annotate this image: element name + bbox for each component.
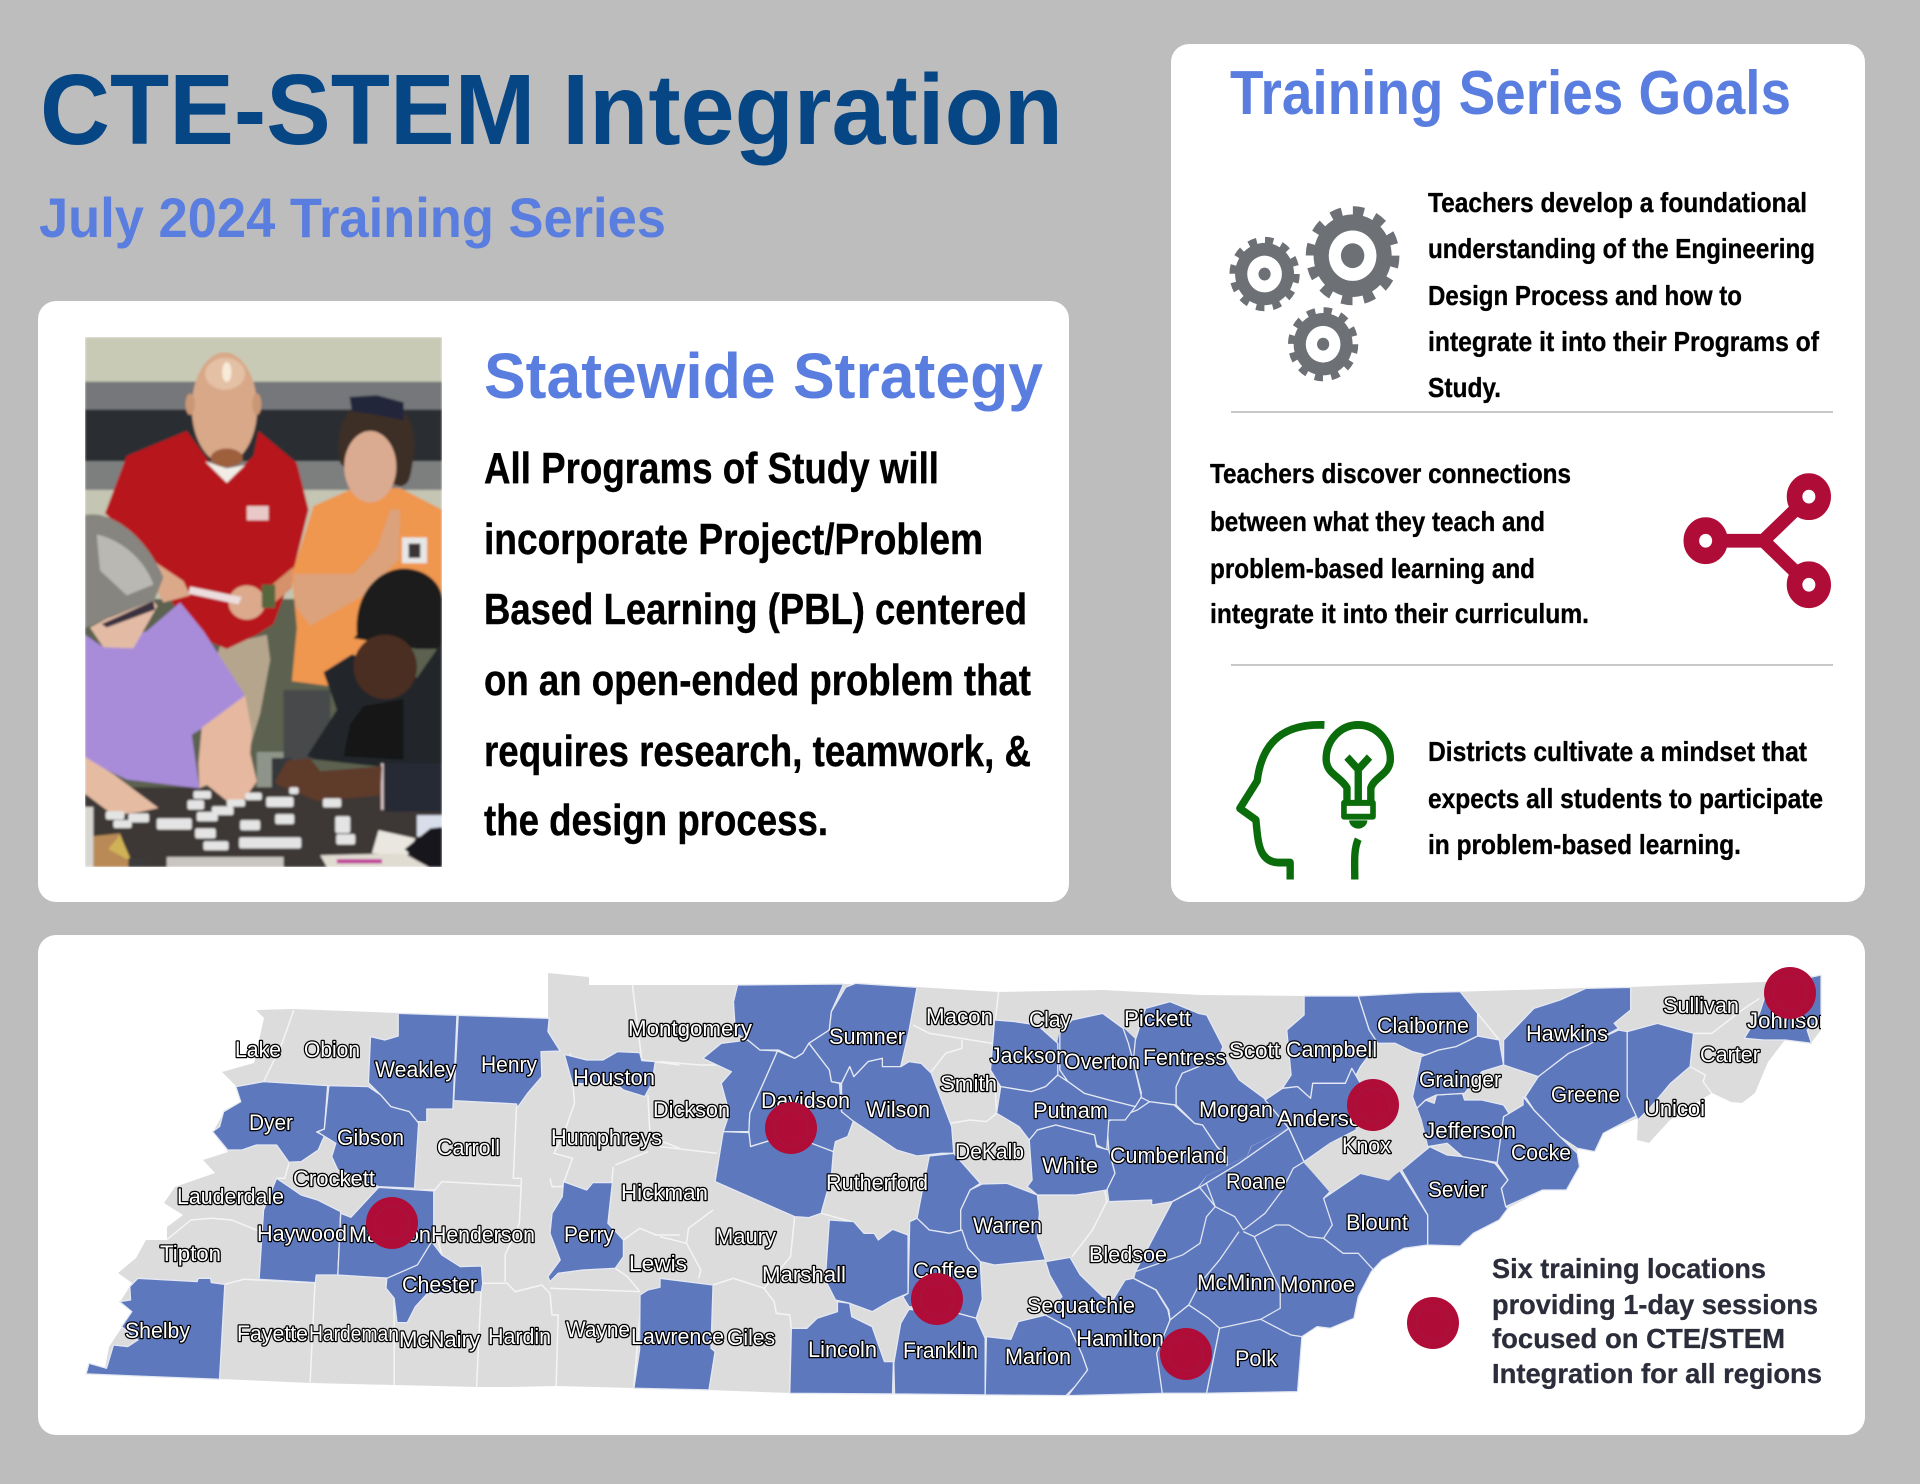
text: strategy statement: requires research, teamwork, &	[484, 727, 1031, 776]
county name labels: Campbell	[1286, 1037, 1377, 1062]
text: goal three: Districts cultivate a mindset that	[1428, 736, 1807, 767]
county name labels: Dickson	[653, 1097, 730, 1122]
county name labels: Lincoln	[808, 1337, 877, 1362]
text: strategy statement	[484, 444, 1031, 845]
text: goal two: Teachers discover connections	[1210, 458, 1571, 489]
county name labels: Lake	[235, 1037, 281, 1062]
county name labels: Hawkins	[1526, 1021, 1608, 1046]
text: goal three: expects all students to participate	[1428, 783, 1823, 814]
text: goal two: between what they teach and	[1210, 506, 1545, 537]
county name labels: Putnam	[1033, 1098, 1108, 1123]
county name labels: Dyer	[249, 1110, 293, 1135]
text: goal one: Study.	[1428, 372, 1501, 403]
text: goal one: integrate it into their Programs of	[1428, 326, 1820, 357]
county name labels: Coffee	[913, 1258, 978, 1283]
county name labels: Warren	[973, 1213, 1042, 1238]
county name labels: Gibson	[337, 1125, 404, 1150]
county name labels: Sequatchie	[1027, 1293, 1135, 1318]
county name labels: Greene	[1551, 1082, 1620, 1107]
county name labels: Lawrence	[631, 1324, 724, 1349]
county name labels: Fayette	[237, 1321, 308, 1346]
text: goal two: problem-based learning and	[1210, 553, 1535, 584]
legend marker	[1407, 1297, 1459, 1349]
text: goal one: Teachers develop a foundational	[1428, 187, 1807, 218]
county name labels: Montgomery	[628, 1016, 752, 1041]
county name labels: Hardeman	[309, 1321, 399, 1346]
text: goal three: in problem-based learning.	[1428, 829, 1741, 860]
county name labels: Rutherford	[826, 1170, 928, 1195]
county name labels: McNairy	[399, 1327, 480, 1352]
blue counties: middle	[634, 983, 1289, 1396]
blue counties: west	[86, 1013, 655, 1379]
county name labels: DeKalb	[955, 1139, 1024, 1164]
heading: training series goals: Training Series Goals	[1230, 59, 1791, 128]
text: goal one: understanding of the Engineering	[1428, 233, 1815, 264]
county name labels: Maury	[715, 1224, 776, 1249]
icon: head with lightbulb	[1240, 725, 1390, 880]
county name labels: Cocke	[1511, 1140, 1571, 1165]
county name labels: Henderson	[431, 1222, 535, 1247]
panel: statewide strategy	[38, 301, 1069, 902]
text: strategy statement: incorporate Project/Problem	[484, 515, 983, 564]
county name labels: Wayne	[566, 1317, 630, 1342]
county name labels: Macon	[926, 1004, 993, 1029]
county name labels: Monroe	[1280, 1272, 1355, 1297]
county name labels: Fentress	[1143, 1045, 1226, 1070]
county name labels: Roane	[1226, 1169, 1286, 1194]
text: strategy statement: on an open-ended problem that	[484, 656, 1031, 705]
county name labels: Franklin	[903, 1338, 978, 1363]
text: goal three	[1428, 736, 1823, 860]
county name labels: Grainger	[1419, 1067, 1501, 1092]
county name labels: Davidson	[761, 1088, 850, 1113]
woman in orange	[292, 488, 442, 690]
legend text: Six training locations	[1492, 1253, 1766, 1284]
county name labels: Clay	[1029, 1007, 1071, 1032]
county name labels: Claiborne	[1377, 1013, 1469, 1038]
seated woman	[354, 569, 442, 649]
county name labels: Bledsoe	[1089, 1242, 1167, 1267]
county name labels: Weakley	[375, 1057, 456, 1082]
county name labels: Hamilton	[1076, 1326, 1164, 1351]
panel: tennessee map	[38, 935, 1865, 1435]
county name labels: Johnson	[1747, 1008, 1831, 1033]
legend text: Integration for all regions	[1492, 1358, 1822, 1389]
text: strategy statement: the design process.	[484, 796, 828, 845]
county name labels: Chester	[402, 1272, 477, 1297]
county name labels: Giles	[727, 1325, 775, 1350]
county name labels: Jackson	[990, 1043, 1068, 1068]
county name labels	[125, 993, 1831, 1371]
county name labels: Houston	[573, 1065, 655, 1090]
county name labels: Wilson	[866, 1097, 930, 1122]
blue counties: east	[1134, 975, 1821, 1393]
legend text: providing 1-day sessions	[1492, 1289, 1818, 1320]
county name labels: Polk	[1235, 1346, 1278, 1371]
county name labels: Haywood	[257, 1221, 347, 1246]
county name labels: Hickman	[621, 1180, 708, 1205]
text: goal one: Design Process and how to	[1428, 280, 1742, 311]
desk items	[372, 830, 415, 856]
county name labels: Tipton	[160, 1241, 221, 1266]
county name labels: Carter	[1700, 1042, 1760, 1067]
county name labels: Cumberland	[1110, 1143, 1227, 1168]
county name labels: Pickett	[1124, 1006, 1191, 1031]
table	[85, 787, 442, 867]
text: goal one	[1428, 187, 1820, 403]
county name labels: Anderson	[1277, 1106, 1374, 1131]
county name labels: Obion	[304, 1037, 360, 1062]
county name labels: Humphreys	[551, 1125, 662, 1150]
county name labels: Sevier	[1428, 1177, 1487, 1202]
subtitle: July 2024 Training Series	[39, 186, 666, 249]
photo: teachers solving a puzzle	[85, 337, 442, 867]
title: CTE-STEM Integration	[40, 54, 1063, 166]
text: strategy statement: Based Learning (PBL) centered	[484, 585, 1027, 634]
puzzle pieces	[106, 787, 355, 850]
text: strategy statement: All Programs of Study will	[484, 444, 939, 493]
county name labels: Sullivan	[1663, 993, 1739, 1018]
county name labels: Hardin	[488, 1324, 551, 1349]
county name labels: Marshall	[762, 1262, 846, 1287]
county name labels: Blount	[1346, 1210, 1408, 1235]
legend text	[1492, 1253, 1822, 1389]
county name labels: White	[1042, 1153, 1098, 1178]
wall and floor	[85, 337, 442, 383]
chair	[284, 690, 330, 760]
text: goal two: integrate it into their curriculum.	[1210, 598, 1589, 629]
text: goal two	[1210, 458, 1589, 629]
county name labels: Overton	[1064, 1049, 1140, 1074]
county name labels: McMinn	[1197, 1270, 1275, 1295]
county name labels: Madison	[349, 1222, 431, 1247]
county name labels: Smith	[940, 1071, 997, 1096]
county name labels: Scott	[1229, 1038, 1280, 1063]
county name labels: Shelby	[125, 1318, 190, 1343]
legend text: focused on CTE/STEM	[1492, 1323, 1785, 1354]
icon: gears	[1232, 211, 1395, 378]
county name labels: Crockett	[293, 1166, 375, 1191]
icon: connected nodes	[1691, 482, 1823, 600]
heading: statewide strategy: Statewide Strategy	[484, 340, 1043, 412]
county name labels: Knox	[1342, 1133, 1391, 1158]
hands of seated woman	[275, 758, 382, 801]
training location markers	[366, 967, 1816, 1380]
panel: training series goals	[1171, 44, 1865, 902]
county name labels: Sumner	[829, 1024, 905, 1049]
county name labels: Lewis	[629, 1251, 687, 1276]
county name labels: Lauderdale	[177, 1184, 284, 1209]
county name labels: Jefferson	[1424, 1118, 1516, 1143]
map: tennessee counties	[86, 967, 1831, 1396]
man	[203, 635, 270, 763]
woman in purple	[85, 603, 245, 788]
county name labels: Henry	[481, 1052, 537, 1077]
county name labels: Unicoi	[1644, 1096, 1705, 1121]
county name labels: Marion	[1005, 1344, 1071, 1369]
county name labels: Carroll	[437, 1135, 500, 1160]
county name labels: Perry	[564, 1222, 614, 1247]
county name labels: Morgan	[1199, 1097, 1273, 1122]
